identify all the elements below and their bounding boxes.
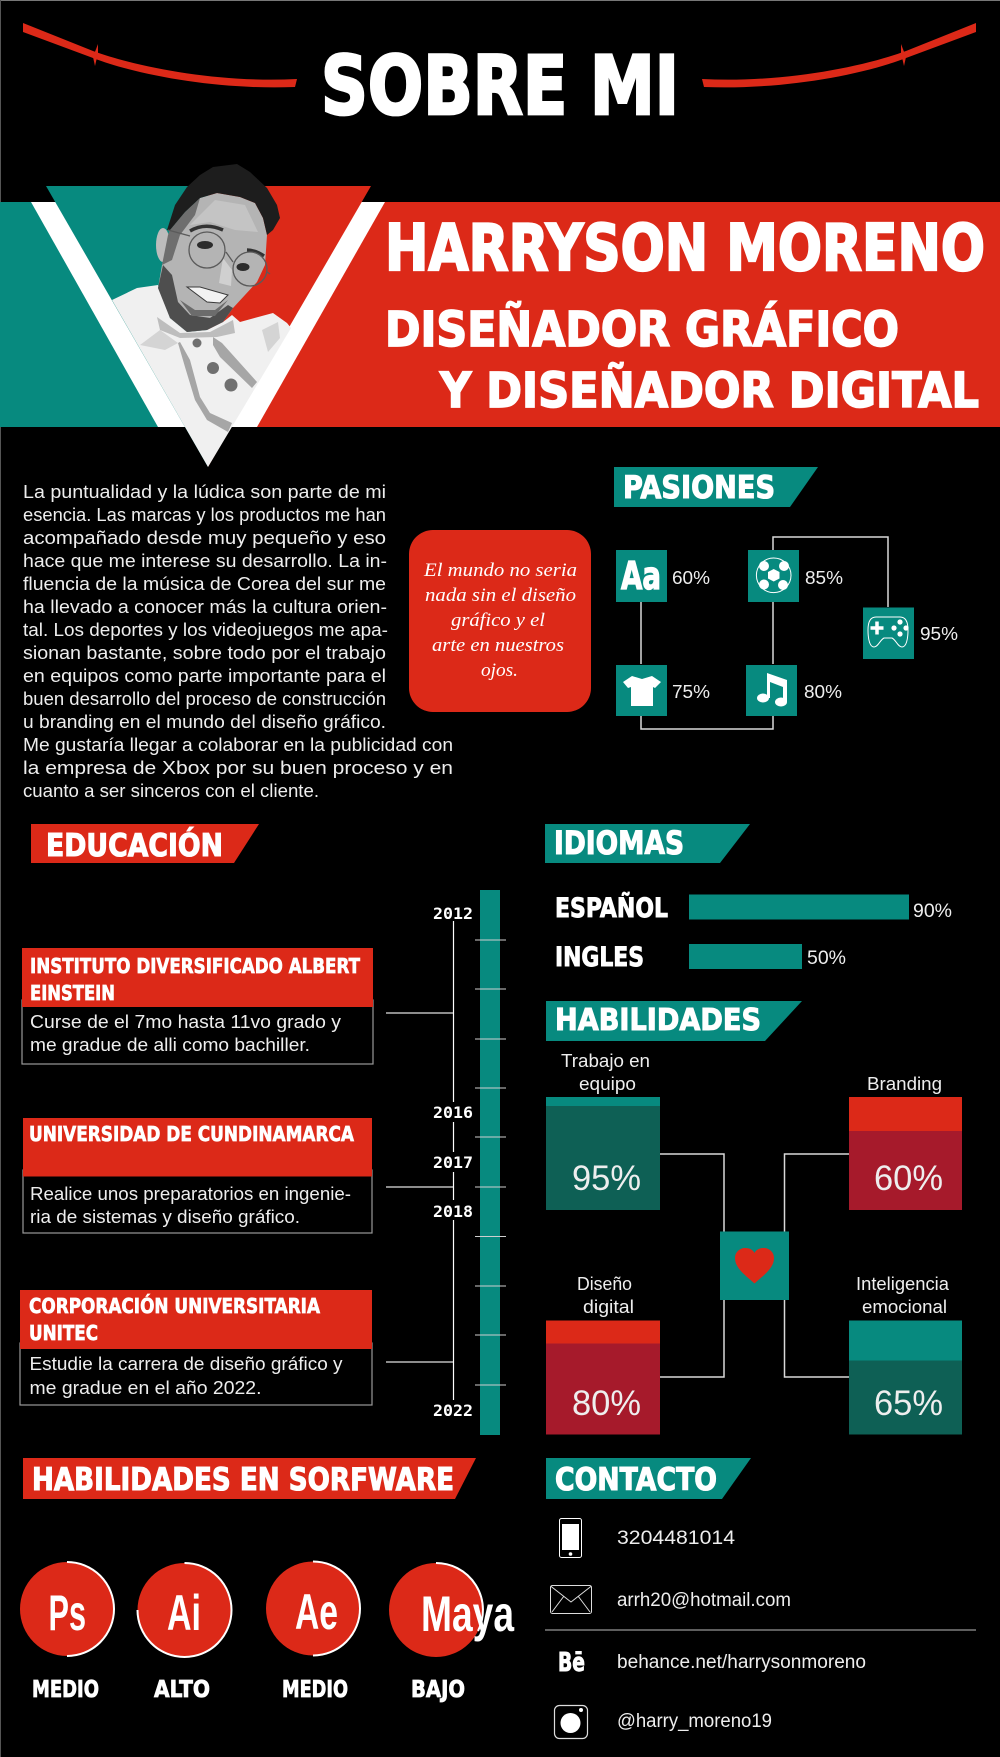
- biography text: buen desarrollo del proceso de construcción: [23, 688, 386, 709]
- skill: branding: Branding: [867, 1074, 942, 1094]
- quote callout: [409, 530, 591, 712]
- quote callout: arte en nuestros: [432, 635, 564, 656]
- skill: trabajo en equipo: Trabajo en: [561, 1051, 650, 1071]
- glasses: [168, 230, 270, 286]
- drawstring left: [178, 342, 232, 432]
- software: illustrator: [138, 1563, 232, 1703]
- language bar: espanol: ESPAÑOL: [555, 892, 668, 924]
- skill: diseno digital: Diseño: [577, 1274, 632, 1294]
- contact: phone: [560, 1518, 735, 1558]
- education card 1: Curse de el 7mo hasta 11vo grado y: [30, 1012, 341, 1032]
- passion: typography: 60%: [672, 568, 710, 588]
- passion: typography: Aa: [621, 554, 661, 598]
- education card 1: me gradue de alli como bachiller.: [30, 1035, 310, 1055]
- education card 2: [23, 1118, 372, 1233]
- skill: trabajo en equipo: [546, 1051, 660, 1210]
- skill: diseno digital: digital: [583, 1297, 634, 1317]
- contact: behance: behance.net/harrysonmoreno: [617, 1652, 866, 1673]
- hair: [167, 164, 280, 235]
- collar: [157, 317, 235, 338]
- biography text: La puntualidad y la lúdica son parte de mi: [23, 481, 386, 502]
- passion: videogames: [863, 608, 958, 659]
- biography text: [23, 481, 453, 801]
- education card 3: Estudie la carrera de diseño gráfico y: [30, 1354, 342, 1374]
- banner: [0, 186, 1000, 467]
- chin shadow: [180, 300, 228, 316]
- software: after effects: [266, 1562, 360, 1703]
- nose highlight: [219, 258, 232, 286]
- education card 1: [22, 948, 373, 1064]
- passion: clothing: [616, 665, 710, 716]
- portrait photo: [112, 164, 291, 467]
- contact: instagram: [554, 1706, 772, 1738]
- beard: [158, 265, 233, 332]
- face: [158, 193, 267, 332]
- timeline: 2016: [433, 1103, 473, 1122]
- language bar: ingles: 50%: [807, 948, 846, 969]
- biography text: hace que me interese su desarrollo. La in-: [23, 550, 387, 571]
- education card 2: Realice unos preparatorios en ingenie-: [30, 1184, 351, 1204]
- timeline: [386, 890, 506, 1435]
- heading: pasiones: PASIONES: [623, 470, 775, 506]
- header ornament: left red curve: [23, 23, 297, 87]
- software: photoshop: MEDIO: [32, 1677, 99, 1703]
- skill: diseno digital: [546, 1274, 660, 1434]
- language bar: ingles: INGLES: [555, 942, 644, 973]
- timeline: 2017: [433, 1153, 473, 1172]
- contact: instagram: @harry_moreno19: [617, 1711, 772, 1732]
- skill: trabajo en equipo: equipo: [579, 1074, 636, 1094]
- contact: phone: 3204481014: [617, 1528, 735, 1549]
- title: SOBRE MI: [321, 40, 679, 134]
- heading: idiomas: IDIOMAS: [554, 824, 684, 862]
- education card 3: UNITEC: [29, 1321, 98, 1345]
- passion: football: 85%: [805, 568, 843, 588]
- biography text: esencia. Las marcas y los productos me han: [23, 504, 386, 525]
- biography text: tal. Los deportes y los videojuegos me apa-: [23, 619, 388, 640]
- eyes: [197, 241, 250, 271]
- language bar: ingles: [555, 942, 846, 973]
- contact divider: [545, 1630, 976, 1631]
- contact: email: [550, 1586, 791, 1614]
- banner background teal: [0, 202, 200, 427]
- shirt: [112, 285, 291, 467]
- icon: heart: [720, 1232, 789, 1300]
- skill: inteligencia emocional: Inteligencia: [856, 1274, 950, 1294]
- education card 1: EINSTEIN: [30, 981, 115, 1005]
- forehead highlight: [190, 200, 258, 232]
- skill: branding: 60%: [874, 1159, 943, 1198]
- shirt buttons: [192, 338, 238, 392]
- contact: behance: [558, 1648, 866, 1678]
- skill: diseno digital: 80%: [572, 1384, 641, 1423]
- software: maya: BAJO: [411, 1677, 465, 1703]
- ear: [156, 228, 170, 262]
- biography text: la empresa de Xbox por su buen proceso y en: [23, 757, 453, 778]
- skill: inteligencia emocional: 65%: [874, 1384, 943, 1423]
- heading: educacion: EDUCACIÓN: [46, 827, 223, 864]
- software: illustrator: ALTO: [154, 1677, 210, 1703]
- skill: trabajo en equipo: 95%: [572, 1159, 641, 1198]
- biography text: acompañado desde muy pequeño y eso: [23, 527, 386, 548]
- software: maya: Maya: [421, 1586, 515, 1642]
- timeline: 2012: [433, 904, 473, 923]
- education card 2: ria de sistemas y diseño gráfico.: [30, 1207, 300, 1227]
- software: illustrator: Ai: [167, 1585, 201, 1641]
- heading: habilidades: HABILIDADES: [555, 1003, 761, 1038]
- passion: videogames: 95%: [920, 624, 958, 644]
- education card 2: UNIVERSIDAD DE CUNDINAMARCA: [29, 1122, 354, 1146]
- software: after effects: MEDIO: [282, 1677, 348, 1703]
- biography text: sionan bastante, sobre todo por el trabajo: [23, 642, 386, 663]
- education card 1: INSTITUTO DIVERSIFICADO ALBERT: [30, 954, 360, 978]
- passion: music: 80%: [804, 682, 842, 702]
- passion: clothing: 75%: [672, 682, 710, 702]
- banner background red: [200, 202, 1000, 427]
- software: maya: [389, 1563, 515, 1703]
- header ornament: right red curve: [702, 23, 976, 87]
- inner triangle teal: [46, 186, 208, 467]
- skill: inteligencia emocional: [849, 1274, 962, 1434]
- quote callout: El mundo no seria: [423, 560, 577, 581]
- role line 1: DISEÑADOR GRÁFICO: [385, 301, 899, 358]
- quote callout: ojos.: [481, 660, 518, 681]
- language bar: espanol: [555, 892, 952, 924]
- education card 3: [20, 1290, 372, 1405]
- quote callout: nada sin el diseño: [425, 585, 576, 606]
- biography text: fluencia de la música de Corea del sur me: [23, 573, 386, 594]
- biography text: u branding en el mundo del diseño gráfico.: [23, 711, 386, 732]
- biography text: Me gustaría llegar a colaborar en la publicidad con: [23, 734, 453, 755]
- skill: branding: [849, 1074, 962, 1210]
- temple shadow: [162, 198, 200, 265]
- inner triangle red: [208, 186, 371, 467]
- white V frame: [31, 202, 385, 427]
- software: photoshop: [20, 1562, 114, 1703]
- passion: football: [748, 550, 843, 602]
- skill connector lines: [660, 1154, 849, 1377]
- timeline: 2022: [433, 1401, 473, 1420]
- shirt shading: [140, 322, 280, 352]
- biography text: ha llevado a conocer más la cultura orien-: [23, 596, 387, 617]
- timeline: 2018: [433, 1202, 473, 1221]
- education card 3: me gradue en el año 2022.: [30, 1378, 262, 1398]
- heading: contacto: CONTACTO: [555, 1462, 717, 1498]
- software: photoshop: Ps: [48, 1585, 86, 1641]
- software: after effects: Ae: [295, 1584, 338, 1640]
- contact: behance: Bē: [558, 1648, 585, 1678]
- biography text: en equipos como parte importante para el: [23, 665, 386, 686]
- heading: habilidades en software: HABILIDADES EN SORFWARE: [32, 1462, 454, 1498]
- contact: email: arrh20@hotmail.com: [617, 1590, 791, 1611]
- passions connector lines: [641, 537, 888, 729]
- passion: typography: [616, 550, 710, 602]
- drawstring right: [213, 337, 257, 388]
- language bar: espanol: 90%: [913, 901, 952, 922]
- skill: inteligencia emocional: emocional: [862, 1297, 947, 1317]
- quote callout: gráfico y el: [451, 610, 545, 631]
- education card 3: CORPORACIÓN UNIVERSITARIA: [29, 1294, 320, 1318]
- passion: music: [746, 665, 842, 716]
- eyebrows: [190, 226, 264, 256]
- biography text: cuanto a ser sinceros con el cliente.: [23, 780, 319, 801]
- mouth: [187, 287, 228, 303]
